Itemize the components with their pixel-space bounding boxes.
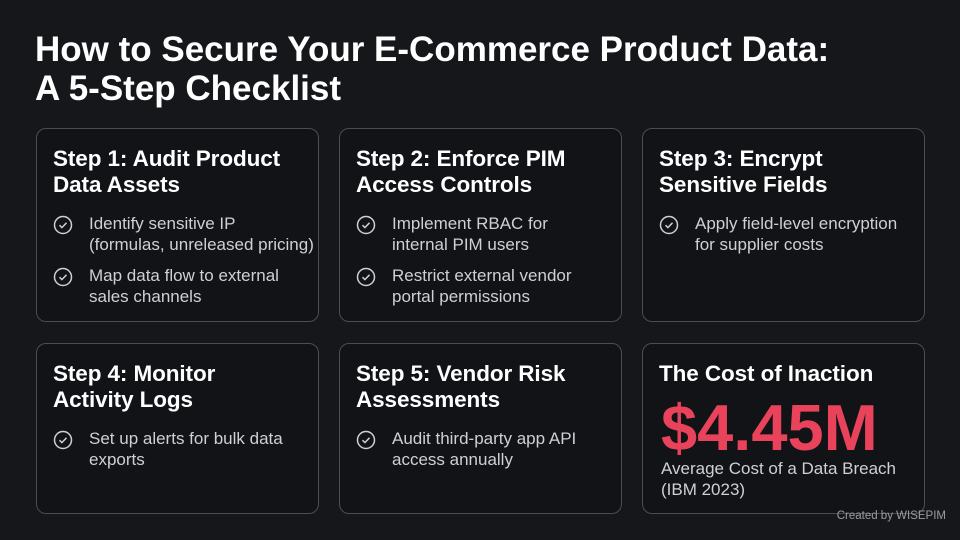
item [54, 266, 279, 306]
item: portal permissions [392, 287, 530, 306]
panel: step 2 [339, 128, 622, 322]
credit: Created by WISEPIM [837, 510, 946, 522]
stat caption [661, 459, 896, 499]
item: Identify sensitive IP [89, 214, 235, 233]
panel: step 4: Activity Logs [53, 387, 193, 412]
item: Set up alerts for bulk data [89, 429, 283, 448]
panel: step 1: Step 1: Audit Product [53, 146, 280, 171]
item: Audit third-party app API [392, 429, 576, 448]
panel: step 3: Sensitive Fields [659, 172, 827, 197]
panel: step 1: Data Assets [53, 172, 180, 197]
item: Apply field-level encryption [695, 214, 897, 233]
panel: step 2: Step 2: Enforce PIM [356, 146, 565, 171]
panel: step 5: Step 5: Vendor Risk [356, 361, 565, 386]
item: Map data flow to external [89, 266, 279, 285]
title: A 5-Step Checklist [35, 69, 341, 108]
item [356, 266, 572, 306]
item: for supplier costs [695, 235, 824, 254]
panel: step 5: Assessments [356, 387, 500, 412]
item [356, 429, 576, 469]
item [54, 214, 314, 254]
item: internal PIM users [392, 235, 529, 254]
item: sales channels [89, 287, 201, 306]
panel: cost of inaction [642, 343, 925, 514]
item [54, 429, 283, 469]
panel: step 4 [36, 343, 319, 514]
panel: step 5 [339, 343, 622, 514]
panel: cost of inaction: The Cost of Inaction [659, 361, 873, 386]
stat caption: Average Cost of a Data Breach [661, 459, 896, 478]
title [35, 30, 829, 108]
item: exports [89, 450, 145, 469]
item: (formulas, unreleased pricing) [89, 235, 314, 254]
stat caption: (IBM 2023) [661, 480, 745, 499]
item [660, 214, 897, 254]
item: Implement RBAC for [392, 214, 548, 233]
item [356, 214, 548, 254]
panel: step 2: Access Controls [356, 172, 532, 197]
panel: step 1 [36, 128, 319, 322]
title: How to Secure Your E-Commerce Product Data: [35, 30, 829, 69]
item: Restrict external vendor [392, 266, 572, 285]
panel: step 3: Step 3: Encrypt [659, 146, 823, 171]
big stat: $4.45M [661, 391, 878, 464]
panel: step 4: Step 4: Monitor [53, 361, 215, 386]
panel: step 3 [642, 128, 925, 322]
item: access annually [392, 450, 513, 469]
